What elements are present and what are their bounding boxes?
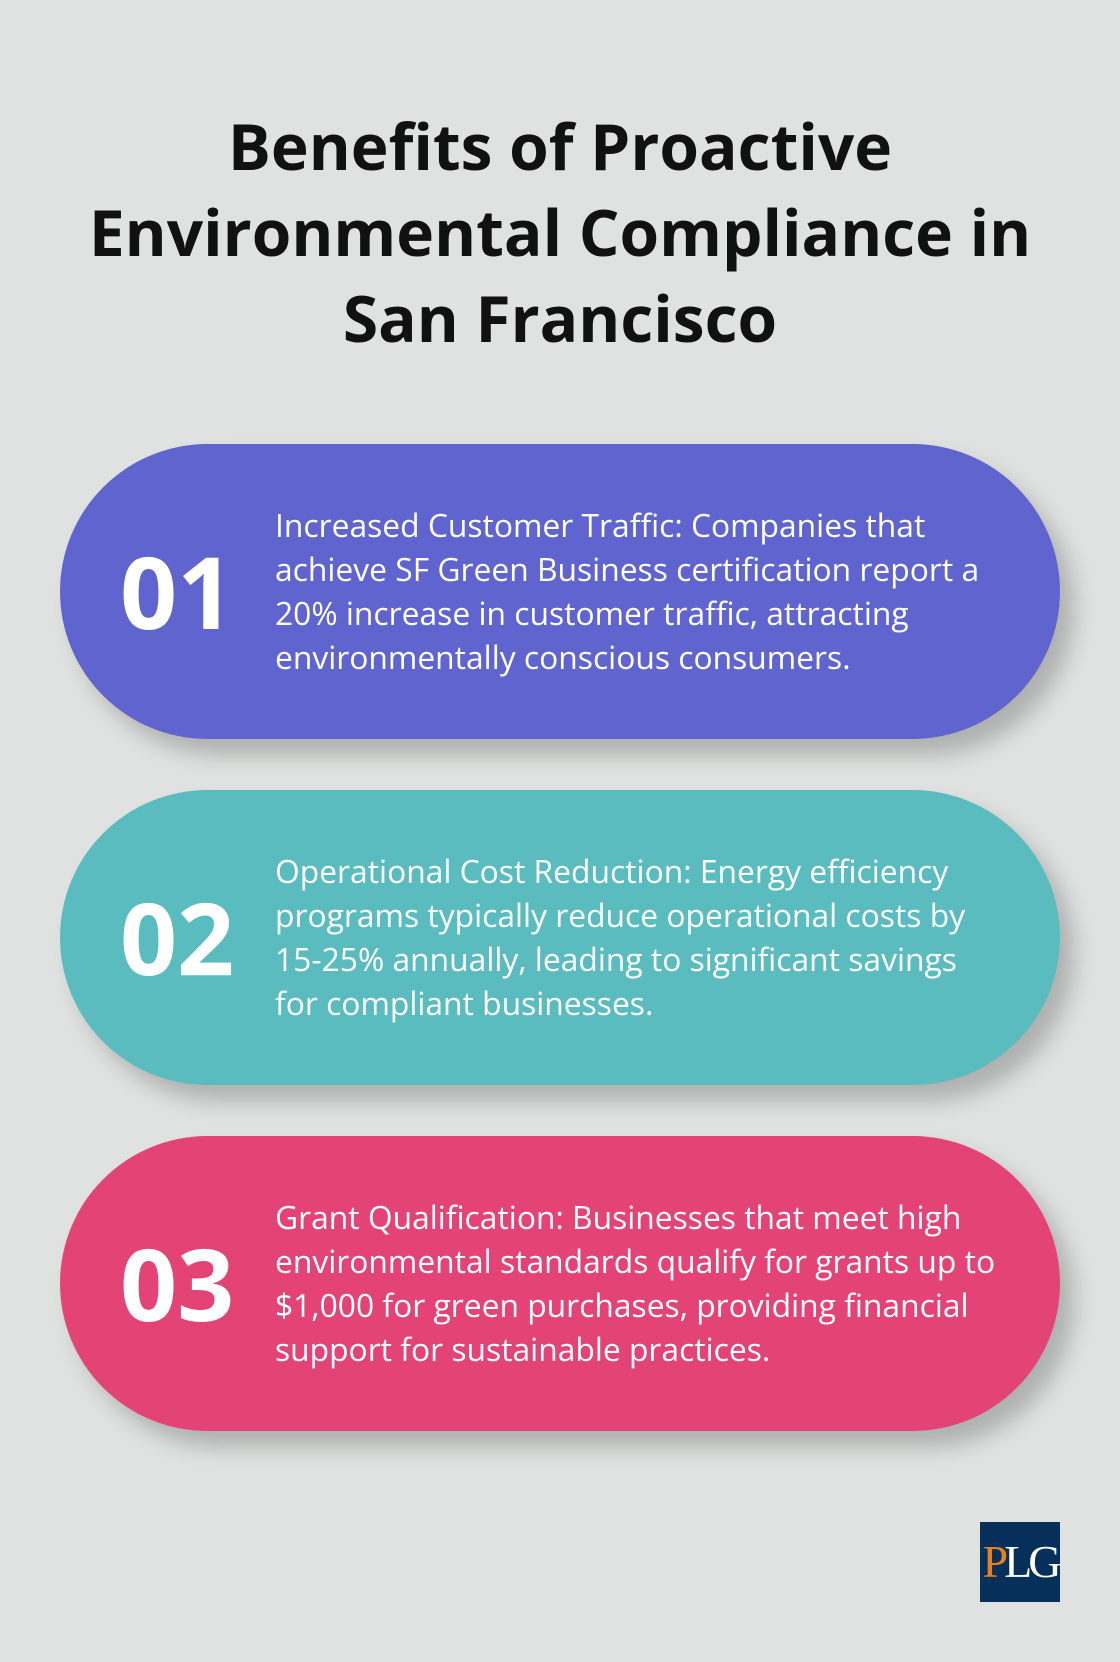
number 02: 02 [120, 869, 234, 1005]
title: Environmental Compliance in [89, 188, 1031, 275]
text 02: Operational Cost Reduction: Energy efficiency programs typically reduce operational costs by 15-25% annually, leading to significant savings for compliant businesses. [275, 850, 965, 1024]
logo: PLG [983, 1536, 1057, 1587]
title: Benefits of Proactive [228, 102, 892, 189]
card 01 [60, 444, 1060, 739]
title: San Francisco [343, 274, 777, 361]
number 01: 01 [120, 523, 234, 659]
number 03: 03 [120, 1215, 234, 1351]
text 03: Grant Qualification: Businesses that meet high environmental standards qualify for grants up to $1,000 for green purchases, providing financial support for sustainable practices. [275, 1196, 995, 1370]
text 01: Increased Customer Traffic: Companies that achieve SF Green Business certification report a 20% increase in customer traffic, attracting environmentally conscious consumers. [275, 504, 979, 678]
logo [980, 1522, 1060, 1602]
card 03 [60, 1136, 1060, 1431]
title [89, 102, 1031, 361]
card 02 [60, 790, 1060, 1085]
